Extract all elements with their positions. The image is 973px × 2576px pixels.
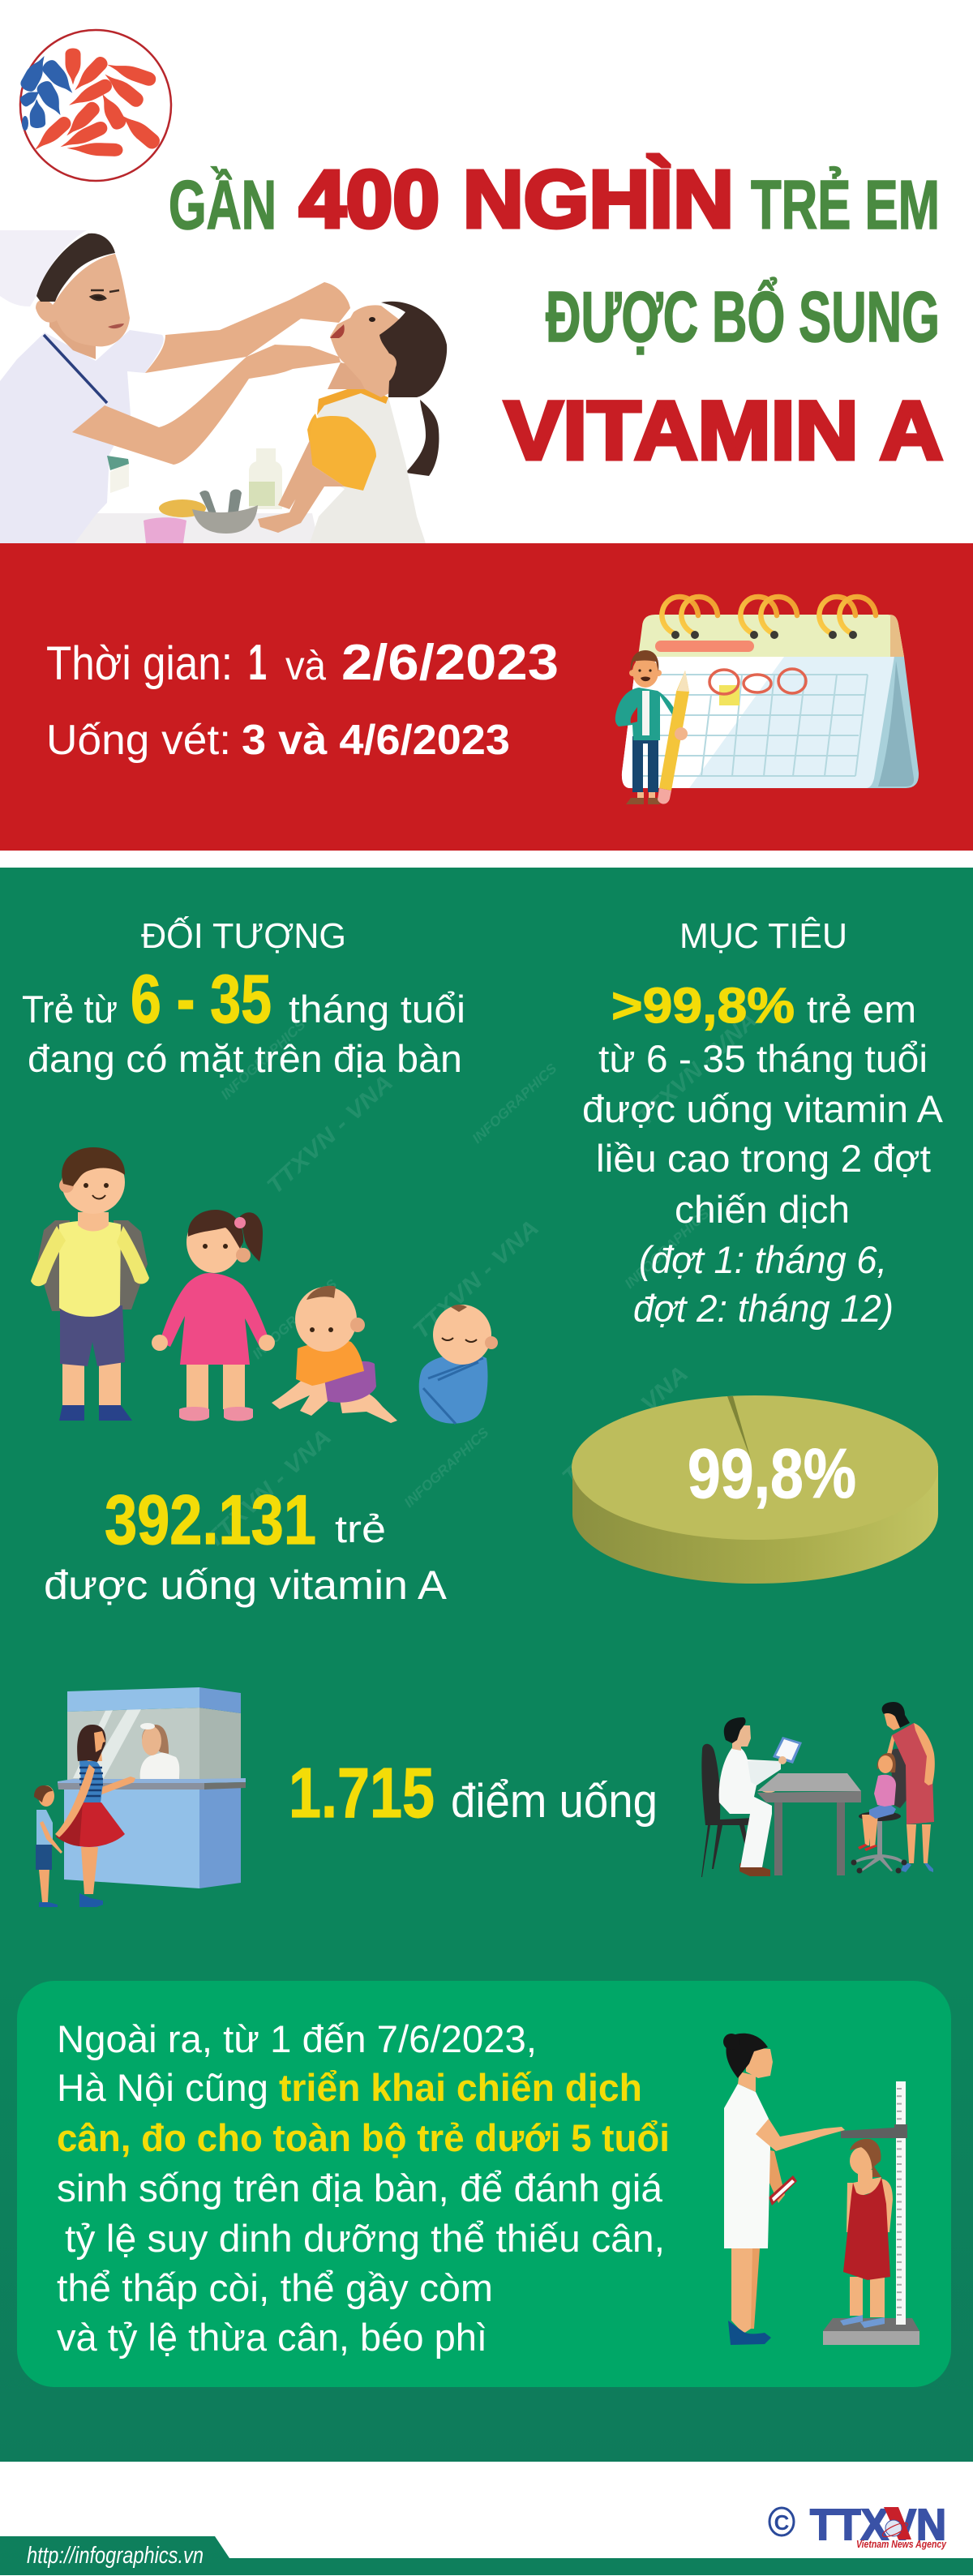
child hair: [379, 302, 447, 397]
child patient: [858, 1753, 896, 1851]
website url: http://infographics.vn: [27, 2543, 204, 2569]
swaddled baby: [419, 1305, 498, 1424]
nurse body: [0, 330, 164, 543]
chart: 99.8% pill: [572, 1395, 938, 1584]
title: [169, 154, 943, 477]
footer strip: [0, 2536, 973, 2575]
text: target group: [22, 961, 465, 1080]
stat: 392.131 children: trẻ: [335, 1507, 386, 1550]
watermarks: TTXVN - VNA: [408, 1215, 543, 1344]
watermarks: INFOGRAPHICS: [668, 1458, 759, 1545]
nurse arms: [145, 282, 350, 373]
cup: [144, 517, 186, 543]
nurse measuring: [723, 2034, 845, 2345]
date text line 1: 1: [248, 635, 267, 691]
campaign text: [57, 2017, 670, 2359]
campaign text: và tỷ lệ thừa cân, béo phì: [57, 2316, 487, 2359]
globe: [881, 2520, 910, 2540]
nurse neck and face: [36, 254, 130, 359]
booth: [64, 1687, 241, 1888]
calendar hole dots: [671, 631, 857, 639]
doctor: [719, 1717, 802, 1876]
boy: [31, 1147, 149, 1421]
text: goal: [582, 978, 944, 1330]
heading: mục tiêu: MỤC TIÊU: [679, 916, 847, 956]
watermarks: INFOGRAPHICS: [250, 1275, 341, 1362]
text: goal: >99,8%: [611, 978, 795, 1033]
girl: [152, 1210, 275, 1421]
illustration: doctor and patient: [701, 1702, 935, 1877]
stat: 1.715 points: điểm uống: [451, 1775, 658, 1828]
campaign text: Hà Nội cũng: [57, 2066, 268, 2109]
photo: nurse giving vitamin A to child: [0, 230, 447, 543]
copyright symbol: C: [774, 2510, 790, 2535]
date text line 1: Thời gian:: [46, 637, 233, 690]
sticky note: [719, 685, 739, 705]
counter: [58, 1778, 246, 1789]
text: goal: đợt 2: tháng 12): [633, 1287, 894, 1330]
chair: [701, 1744, 755, 1877]
book: [773, 1737, 802, 1764]
text: goal: được uống vitamin A: [582, 1087, 944, 1130]
child ear: [374, 353, 396, 374]
icon: calendar: [622, 597, 919, 788]
campaign text: Ngoài ra, từ 1 đến 7/6/2023,: [57, 2017, 537, 2060]
text: target group: tháng tuổi: [289, 988, 465, 1031]
text: goal: (đợt 1: tháng 6,: [639, 1238, 887, 1281]
watermarks: INFOGRAPHICS: [469, 1060, 560, 1147]
stat: 1.715 points: 1.715: [289, 1754, 435, 1832]
agency subtitle: Vietnam News Agency: [856, 2538, 947, 2550]
text: target group: đang có mặt trên địa bàn: [28, 1037, 462, 1080]
illustration: vitamin booth: [34, 1687, 246, 1907]
agency wordmark: TTXVN: [810, 2501, 946, 2549]
stool back: [890, 1749, 907, 1808]
badge: [107, 456, 129, 493]
title line 1: GẦN: [169, 166, 276, 244]
crawling baby: [272, 1286, 397, 1423]
pill value: 99,8%: [688, 1435, 856, 1513]
icon: vitamin A capsules in circle: [19, 30, 171, 181]
campaign text: cân, đo cho toàn bộ trẻ dưới 5 tuổi: [57, 2116, 670, 2159]
campaign text: sinh sống trên địa bàn, để đánh giá: [57, 2167, 663, 2210]
stat: 392.131 children: 392.131: [105, 1481, 316, 1559]
panel: green body: [0, 868, 973, 2462]
boy at booth: [34, 1785, 62, 1907]
watermarks: TTXVN - VNA: [557, 1361, 692, 1489]
text: target group: Trẻ từ: [22, 988, 118, 1031]
scale: [823, 2081, 919, 2345]
campaign text: tỷ lệ suy dinh dưỡng thể thiếu cân,: [65, 2217, 665, 2260]
date text line 1: và: [285, 643, 326, 688]
nurse cap: [0, 230, 87, 306]
mother: [882, 1702, 935, 1872]
illustration: children: [31, 1147, 498, 1424]
nurse hair: [36, 234, 115, 302]
date text line 1: [46, 635, 559, 691]
watermarks: INFOGRAPHICS: [401, 1424, 492, 1511]
calendar rings: [662, 597, 876, 634]
stat: 1.715 points: [289, 1754, 658, 1832]
campaign text: thể thấp còi, thể gầy còm: [57, 2266, 493, 2309]
stat: 392.131 children: được uống vitamin A: [44, 1562, 448, 1608]
mother at booth: [55, 1725, 135, 1907]
watermarks: INFOGRAPHICS: [218, 1016, 309, 1103]
logo: TTXVN: [769, 2501, 947, 2550]
lanyard: [44, 335, 107, 403]
title line 1: 400 NGHÌN: [299, 154, 734, 245]
copyright symbol: [769, 2508, 794, 2535]
child arms: [258, 440, 345, 533]
panel: date band: [0, 543, 973, 851]
dish and bowl: [159, 490, 258, 534]
illustration: height measurement: [723, 2034, 919, 2345]
booth nurse: [140, 1723, 179, 1780]
red circled dates: [709, 669, 806, 694]
figure: man with pencil: [615, 650, 689, 804]
panel: additional campaign: [17, 1981, 951, 2387]
title line 3: VITAMIN A: [504, 384, 943, 477]
child collar and sleeve: [307, 385, 388, 491]
watermarks: TTXVN - VNA: [262, 1069, 397, 1198]
table: [757, 1773, 861, 1875]
text: goal: từ 6 - 35 tháng tuổi: [598, 1037, 928, 1080]
watermarks: TTXVN - VNA: [632, 1007, 761, 1130]
child shirt: [310, 385, 426, 543]
title line 1: [169, 154, 940, 245]
watermarks: [200, 1007, 761, 1553]
calendar grid: [641, 675, 868, 776]
date text line 2: 3 và 4/6/2023: [242, 717, 510, 764]
watermarks: INFOGRAPHICS: [622, 1205, 713, 1292]
table: [74, 513, 319, 543]
child being measured: [840, 2139, 893, 2328]
text: goal: liều cao trong 2 đợt: [596, 1137, 931, 1180]
watermarks: TTXVN - VNA: [200, 1424, 336, 1553]
date text line 2: Uống vét:: [46, 717, 231, 764]
stat: 392.131 children: [44, 1481, 448, 1608]
text: target group: 6 - 35: [131, 961, 272, 1037]
red stroke of V: [884, 2507, 911, 2540]
stool: [851, 1811, 907, 1873]
child pigtail: [405, 400, 439, 476]
heading: đối tượng: ĐỐI TƯỢNG: [141, 915, 346, 956]
campaign text: triển khai chiến dịch: [279, 2066, 642, 2109]
date text line 2: [46, 717, 510, 764]
text: goal: trẻ em: [807, 988, 916, 1031]
bottle: [249, 448, 282, 509]
child face: [328, 305, 405, 397]
date text line 1: 2/6/2023: [341, 635, 559, 691]
text: goal: chiến dịch: [675, 1188, 850, 1231]
